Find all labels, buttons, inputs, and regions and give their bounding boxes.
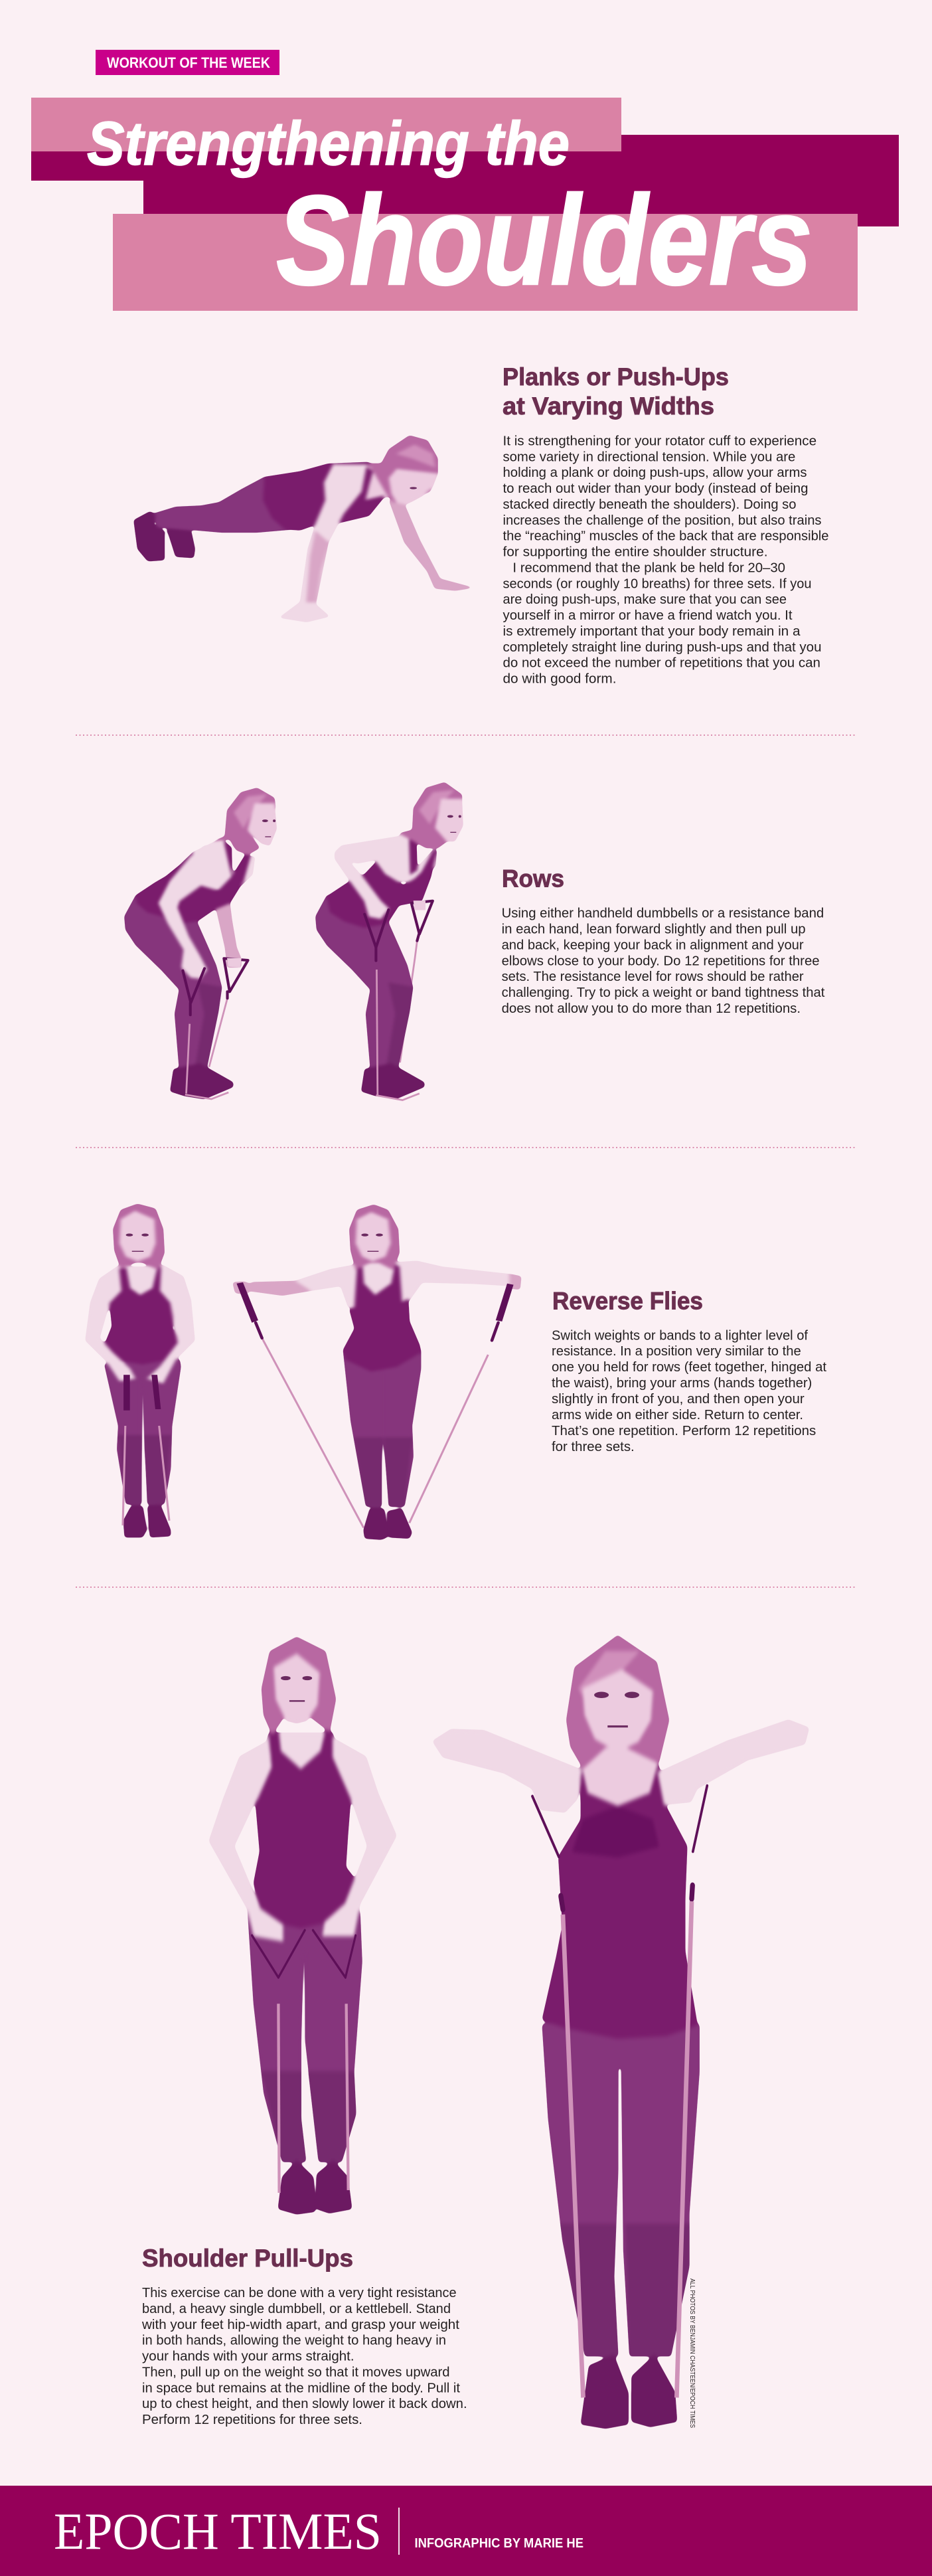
text: reverse flies description — [552, 1328, 826, 1454]
text: planks description: seconds (or roughly 10 breaths) for three sets. If you — [503, 576, 811, 591]
photo credit: ALL PHOTOS BY BENJAMIN CHASTEEN/EPOCH TIMES — [688, 2278, 696, 2428]
figure: rows arms down — [125, 788, 277, 1099]
text: shoulder pull-ups description: up to chest height, and then slowly lower it back down. — [142, 2396, 467, 2411]
photo: plank — [134, 436, 473, 622]
heading: reverse flies: Reverse Flies — [552, 1287, 703, 1315]
text: shoulder pull-ups description: This exercise can be done with a very tight resistance — [142, 2285, 457, 2300]
text: reverse flies description: one you held for rows (feet together, hinged at — [552, 1359, 826, 1375]
heading: planks: at Varying Widths — [503, 392, 714, 420]
figure: flies closed — [86, 1204, 194, 1537]
figure: pull-up raised — [433, 1636, 809, 2428]
text: planks description: is extremely important that your body remain in a — [503, 624, 801, 639]
footer: INFOGRAPHIC BY MARIE HE — [414, 2536, 583, 2551]
text: planks description: stacked directly beneath the shoulders). Doing so — [503, 497, 797, 512]
text: reverse flies description: slightly in front of you, and then open your — [552, 1391, 805, 1407]
heading: shoulder pull-ups: Shoulder Pull-Ups — [142, 2244, 353, 2272]
text: rows description: elbows close to your body. Do 12 repetitions for three — [502, 953, 820, 968]
footer: EPOCH TIMES — [54, 2502, 382, 2560]
text: shoulder pull-ups description: band, a heavy single dumbbell, or a kettlebell. Stand — [142, 2301, 451, 2316]
text: shoulder pull-ups description: Then, pull up on the weight so that it moves upward — [142, 2364, 450, 2379]
text: reverse flies description: arms wide on either side. Return to center. — [552, 1407, 803, 1422]
text: reverse flies description: the waist), bring your arms (hands together) — [552, 1375, 812, 1391]
text: reverse flies description: Switch weights or bands to a lighter level of — [552, 1328, 808, 1343]
text: reverse flies description: That’s one repetition. Perform 12 repetitions — [552, 1423, 816, 1438]
text: shoulder pull-ups description: Perform 12 repetitions for three sets. — [142, 2412, 362, 2427]
text: planks description: I recommend that the plank be held for 20–30 — [512, 560, 785, 575]
text: shoulder pull-ups description: your hands with your arms straight. — [142, 2348, 354, 2364]
text: reverse flies description: resistance. In a position very similar to the — [552, 1343, 801, 1359]
text: shoulder pull-ups description: with your feet hip-width apart, and grasp your weight — [141, 2317, 459, 2332]
footer — [0, 2486, 932, 2576]
text: planks description: for supporting the entire shoulder structure. — [503, 545, 767, 560]
text: rows description: in each hand, lean forward slightly and then pull up — [502, 922, 806, 937]
photo: shoulder pull-ups — [209, 1636, 809, 2428]
text: planks description: do with good form. — [503, 671, 616, 687]
text: shoulder pull-ups description: in both hands, allowing the weight to hang heavy in — [142, 2333, 446, 2348]
text: planks description: holding a plank or doing push-ups, allow your arms — [503, 465, 807, 480]
text: planks description: some variety in directional tension. While you are — [503, 449, 795, 464]
figure: pull-up start — [209, 1638, 396, 2214]
tag: workout of the week — [96, 50, 279, 75]
title banner: Strengthening the — [87, 109, 570, 178]
title banner: Shoulders — [276, 169, 813, 311]
text: shoulder pull-ups description: in space but remains at the midline of the body. Pull it — [142, 2380, 460, 2395]
text: rows description: does not allow you to do more than 12 repetitions. — [502, 1001, 801, 1016]
text: planks description — [503, 433, 828, 687]
text: planks description: completely straight line during push-ups and that you — [503, 640, 822, 655]
text: planks description: It is strengthening for your rotator cuff to experience — [503, 433, 816, 449]
text: rows description: challenging. Try to pick a weight or band tightness that — [502, 985, 825, 1000]
text: rows description: and back, keeping your back in alignment and your — [502, 938, 804, 952]
heading: rows: Rows — [502, 865, 564, 893]
photo: reverse flies — [86, 1204, 521, 1539]
photo: rows — [125, 782, 463, 1100]
title banner — [31, 98, 899, 311]
text: planks description: yourself in a mirror or have a friend watch you. It — [503, 608, 793, 623]
text: shoulder pull-ups description — [141, 2285, 467, 2427]
text: planks description: do not exceed the number of repetitions that you can — [503, 655, 820, 671]
tag: workout of the week: WORKOUT OF THE WEEK — [107, 54, 270, 71]
heading: planks — [503, 363, 729, 420]
text: planks description: to reach out wider than your body (instead of being — [503, 481, 809, 496]
text: rows description: sets. The resistance level for rows should be rather — [502, 969, 804, 984]
text: planks description: are doing push-ups, make sure that you can see — [503, 592, 787, 607]
figure: flies open — [233, 1205, 521, 1539]
text: reverse flies description: for three sets. — [552, 1439, 635, 1454]
figure: rows arms pulled — [315, 782, 463, 1100]
heading: planks: Planks or Push-Ups — [503, 363, 729, 390]
text: planks description: increases the challenge of the position, but also trains — [503, 513, 822, 528]
text: rows description — [502, 906, 825, 1016]
text: rows description: Using either handheld dumbbells or a resistance band — [502, 906, 824, 921]
text: planks description: the “reaching” muscles of the back that are responsible — [503, 529, 828, 544]
